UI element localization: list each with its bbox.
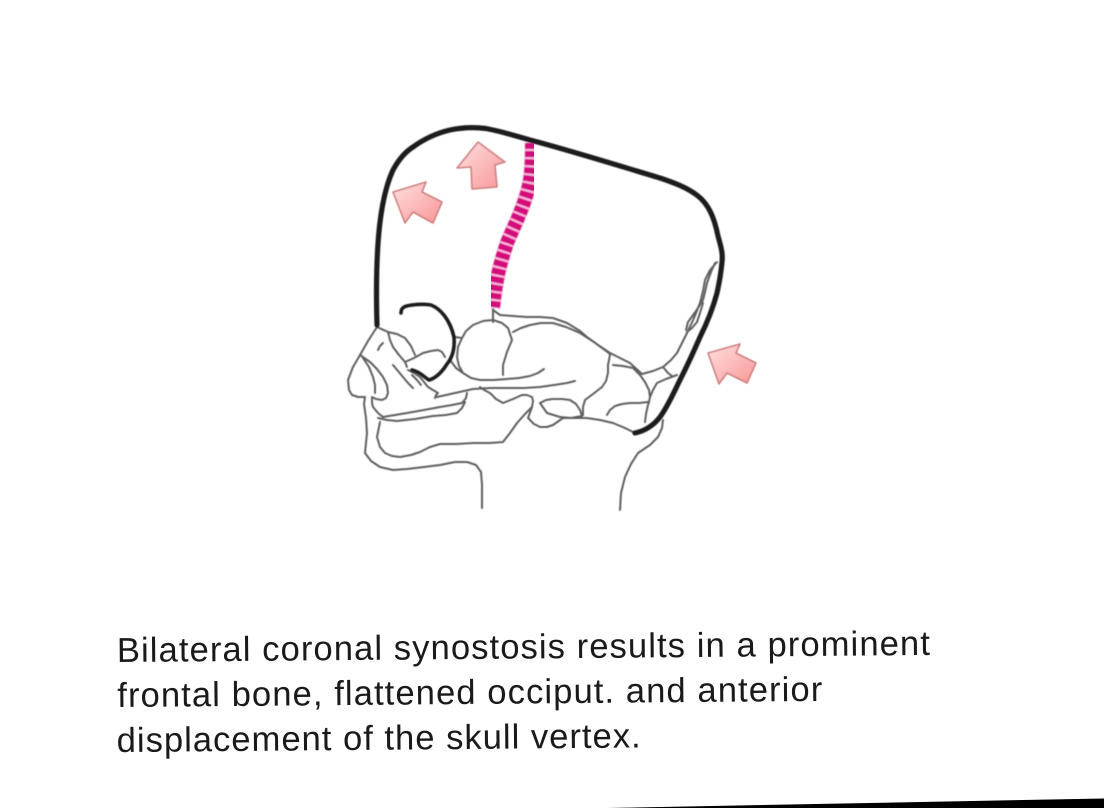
caption text: displacement of the skull vertex. [117, 717, 641, 760]
arrow: frontal bone prominence [393, 182, 442, 223]
caption text: frontal bone, flattened occiput. and anterior [117, 671, 822, 715]
caption text [116, 625, 931, 760]
thick black skull outline [376, 128, 722, 433]
skull illustration [348, 128, 722, 510]
fused coronal suture (magenta dashed band) [493, 143, 532, 308]
thin skull and neck contour lines [348, 262, 717, 510]
caption text: Bilateral coronal synostosis results in a prominent [117, 625, 930, 670]
black curved orbit line [401, 304, 454, 380]
arrow: upward vertex displacement [457, 142, 505, 189]
black wedge at bottom edge [607, 798, 1104, 808]
arrow: flattened occiput [708, 344, 756, 384]
